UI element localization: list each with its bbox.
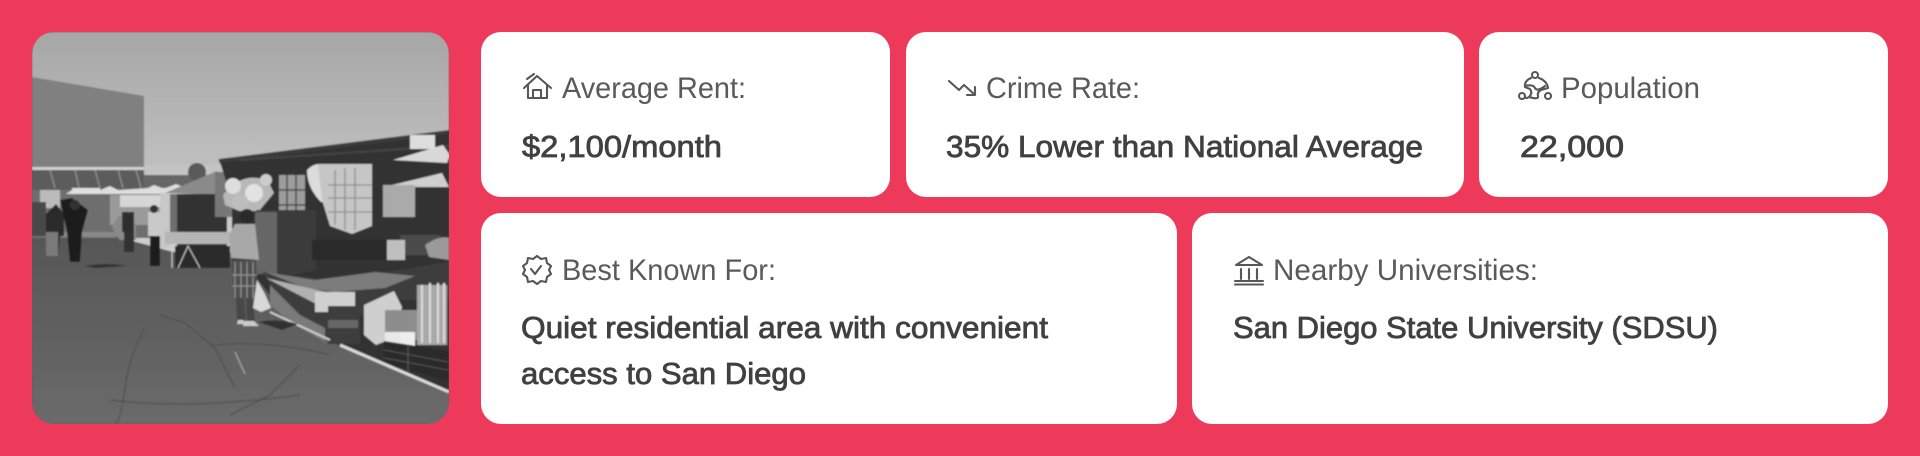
icon: trend down arrow [949,81,975,95]
label: nearby universities: Nearby Universities: [1273,254,1538,287]
value: best known for [521,311,1049,391]
panel: crime rate [906,32,1464,197]
icon: badge check [523,256,551,284]
value: best known for: Quiet residential area with convenient [521,311,1049,345]
cracks [110,315,330,424]
value: crime rate: 35% Lower than National Average [946,130,1423,164]
label: population: Population [1561,72,1700,105]
people [46,204,64,256]
panel: population [1479,32,1888,197]
panel: average rent [481,32,890,197]
value: average rent: $2,100/month [522,130,722,164]
label: crime rate: Crime Rate: [986,72,1140,105]
label: best known for: Best Known For: [562,254,776,287]
value: best known for: access to San Diego [521,357,806,391]
icon: university building [1235,257,1263,284]
icon: house [524,74,551,98]
value: nearby universities: San Diego State University (SDSU) [1233,311,1718,345]
icon: people network [1519,72,1551,99]
panel: nearby universities [1192,213,1888,424]
panel: best known for [481,213,1177,424]
photo: flea market in grayscale [32,32,450,424]
label: average rent: Average Rent: [562,72,746,105]
value: population: 22,000 [1520,130,1624,164]
